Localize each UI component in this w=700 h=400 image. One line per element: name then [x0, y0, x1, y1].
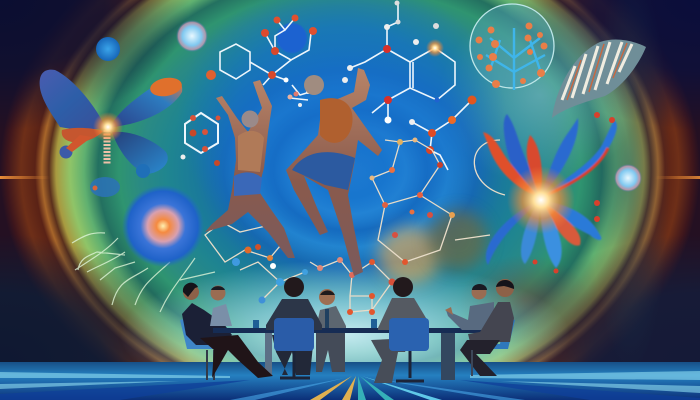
- icon: glowing orbs: [96, 20, 642, 267]
- person: back left with chair: [266, 277, 322, 378]
- person: centre facing: [316, 289, 346, 372]
- molecule: upper chains: [180, 0, 476, 170]
- figure: right dancer: [286, 68, 382, 276]
- table legs: [265, 333, 455, 380]
- person: far left: [180, 283, 273, 380]
- table top: [213, 328, 498, 333]
- icon: exploding flower: [483, 112, 617, 274]
- icon: wave lines: [72, 233, 215, 312]
- floor: light streaks: [0, 362, 700, 400]
- person: far right with chair: [460, 279, 515, 376]
- icon: radial tree: [470, 4, 554, 90]
- icon: butterfly: [40, 70, 183, 197]
- person: left shirt: [210, 286, 232, 326]
- molecule: lower network: [205, 138, 505, 315]
- person: right gesturing: [445, 284, 494, 330]
- person: back right with chair: [371, 277, 429, 383]
- lens flares: [0, 176, 700, 179]
- boardroom: table and team: [180, 277, 515, 383]
- figure: left dancer: [205, 80, 295, 258]
- haze: amber glow behind molecules: [378, 210, 488, 283]
- icon: DNA helix: [552, 40, 646, 118]
- cups: [253, 319, 377, 328]
